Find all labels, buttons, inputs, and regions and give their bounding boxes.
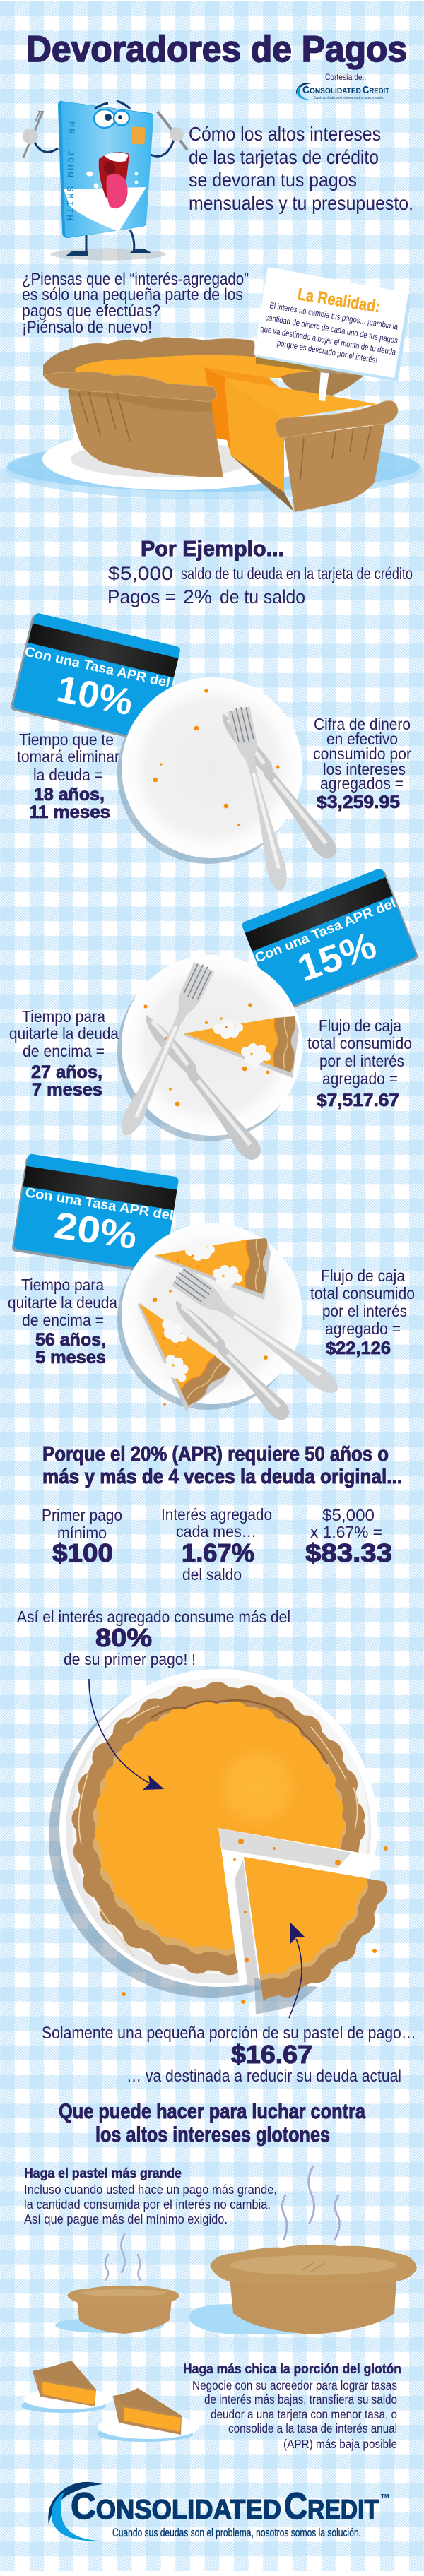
tip 2: haga mas chica la porcion: deudor a una tarjeta con menor tasa, o [211,2407,397,2421]
stat: interes agregado: cada mes… [176,1522,257,1541]
heading: porque el 20% [42,1443,402,1488]
illustration: big pie with slice [6,337,421,512]
icon: steam over small pie [105,2234,141,2280]
intro text: de las tarjetas de crédito [189,146,379,168]
plate 3: two slices with crumbs [108,1223,344,1425]
text: 80 percent [17,1608,290,1668]
courtesy logo: CONSOLIDATED [302,84,361,96]
text: cost 20%: $22,126 [326,1339,391,1358]
card: 15% APR: 15% [293,925,382,990]
text: cost 10%: $3,259.95 [317,793,400,812]
card: 10% APR: 10% [54,668,136,723]
text: cost 20% [310,1266,415,1358]
illustration: two slices on plates [21,2361,199,2442]
stat: interes agregado: 1.67% [182,1538,254,1567]
tip 1: haga el pastel mas grande [24,2166,277,2226]
card: 15% APR [241,867,419,1014]
text: time 10% [17,730,119,822]
question text: ¿Piensas que el “interés-agregado” [22,270,249,289]
text: cost 15%: por el interés [319,1052,404,1070]
tip 1: haga el pastel mas grande: la cantidad consumida por el interés no cambia. [24,2197,271,2212]
heading: que puede hacer [59,2100,365,2147]
callout: la realidad sign [254,267,412,401]
callout: la realidad sign: porque es devorado por el interés! [276,338,378,365]
text: cost 10%: Cifra de dinero [314,715,411,733]
example text: $5,000 [108,563,173,584]
example text [107,563,413,607]
text: time 15%: 27 años, [31,1062,102,1082]
text: 80 percent: 80% [95,1623,152,1652]
text: 80 percent: Así el interés agregado consume más del [17,1608,290,1626]
text: time 10%: tomará eliminar [17,747,119,766]
arrow: to big portion [89,1679,164,1790]
text: time 20%: quitarte la deuda [8,1293,118,1312]
courtesy logo: Cortesía de... [325,72,368,82]
text: cost 15%: agregado = [322,1069,398,1088]
stat: interes agregado [161,1505,272,1584]
stat: primer pago: Primer pago [42,1506,122,1524]
intro text: se devoran tus pagos [189,169,357,191]
stat: interes agregado: Interés agregado [161,1505,272,1524]
tip 2: haga mas chica la porcion: de interés más bajas, transfiera su saldo [204,2392,397,2406]
card: 20% APR [11,1153,179,1275]
courtesy logo [296,72,389,100]
callout: la realidad sign: La Realidad: [296,285,382,316]
text: cost 15% [307,1016,412,1110]
illustration: big pie side view [189,2245,417,2334]
stat: primer pago: $100 [52,1538,113,1567]
text: cost 15%: $7,517.67 [317,1091,399,1110]
plate 2: slice with crumbs [114,955,302,1165]
icon: steam over big pie [282,2166,339,2239]
text: cost 20%: por el interés [322,1302,407,1320]
question text [22,270,249,337]
tip 1: haga el pastel mas grande: Incluso cuando usted hace un pago más grande, [24,2182,277,2197]
text: cost 15%: total consumido [307,1034,412,1052]
stat: primer pago: mínimo [57,1524,107,1542]
text: cost 15%: Flujo de caja [319,1016,402,1035]
stat: interes agregado: del saldo [182,1565,242,1584]
card: 20% APR: Con una Tasa APR del [24,1185,175,1223]
tip 2: haga mas chica la porcion: Haga más chica la porción del glotón [183,2362,401,2377]
arrow: to small portion [289,1923,305,2018]
example text: de tu saldo [220,586,305,607]
text: cost 20%: Flujo de caja [321,1266,406,1285]
text: time 20%: 56 años, [35,1330,106,1350]
footer logo: TM [381,2493,389,2500]
text: time 20% [8,1276,118,1367]
tip 1: haga el pastel mas grande: Así que pague más del mínimo exigido. [24,2212,228,2226]
stat: calculo [305,1506,392,1567]
text: time 15%: Tiempo para [22,1007,106,1026]
stat: calculo: x 1.67% = [310,1523,382,1541]
intro text: Cómo los altos intereses [189,123,381,145]
text: time 10%: Tiempo que te [19,730,114,749]
intro text [189,123,413,214]
illustration: small pie side view [55,2286,179,2334]
heading: por ejemplo: Por Ejemplo... [141,536,284,561]
text: 80 percent: de su primer pago! ! [64,1650,196,1668]
icon: hungry credit card character: MR. JOHN SMITH [64,121,76,220]
text: time 15%: quitarte la deuda [9,1024,119,1043]
footer logo: CREDIT [284,2486,379,2527]
text: cost 10%: en efectivo [326,730,398,748]
text: solamente una porcion [42,2024,416,2086]
plate 1: empty with crumbs [117,677,341,894]
question text: pagos que efectúas? [22,302,160,321]
heading: porque el 20%: Porque el 20% (APR) requiere 50 años o [42,1443,389,1466]
text: cost 20%: agregado = [325,1319,401,1338]
text: time 20%: 5 meses [35,1348,106,1367]
text: time 15%: de encima = [23,1042,105,1060]
text: time 10%: 11 meses [29,802,110,822]
stat: primer pago [42,1506,122,1567]
courtesy logo: CREDIT [363,84,389,96]
stat: calculo: $5,000 [322,1506,375,1524]
text: cost 10% [313,715,411,812]
text: cost 10%: consumido por [313,744,411,763]
text: time 10%: la deuda = [33,766,103,784]
card: 10% APR [10,612,181,744]
footer logo: CONSOLIDATED [71,2486,281,2527]
question text: es sólo una pequeña parte de los [22,285,243,304]
text: solamente una porcion: $16.67 [231,2040,312,2069]
tip 2: haga mas chica la porcion [183,2362,401,2451]
illustration: top view pie with cut slice [49,1669,388,2014]
tip 2: haga mas chica la porcion: consolide a la tasa de interés anual [228,2421,397,2435]
card: 20% APR: 20% [52,1204,139,1257]
heading: que puede hacer: los altos intereses glotones [95,2123,330,2147]
icon: hungry credit card character [23,101,187,260]
text: time 20%: Tiempo para [21,1276,105,1294]
tip 2: haga mas chica la porcion: (APR) más baja posible [283,2437,397,2451]
text: time 10%: 18 años, [34,785,105,805]
heading: que puede hacer: Que puede hacer para luchar contra [59,2100,365,2123]
text: cost 10%: agregados = [320,774,404,793]
title: Devoradores de Pagos [26,29,407,70]
text: time 20%: de encima = [22,1311,104,1329]
example text: 2% [183,586,212,607]
tip 1: haga el pastel mas grande: Haga el pastel más grande [24,2166,182,2181]
text: cost 20%: total consumido [310,1284,415,1302]
question text: ¡Piénsalo de nuevo! [22,318,152,337]
text: time 15% [9,1007,119,1100]
text: cost 10%: los intereses [323,760,406,778]
example text: Pagos = [107,586,176,607]
card: 15% APR: Con una Tasa APR del [253,896,398,966]
footer logo [48,2482,389,2541]
tip 2: haga mas chica la porcion: Negocie con su acreedor para lograr tasas [192,2378,397,2392]
text: time 15%: 7 meses [32,1080,102,1100]
stat: calculo: $83.33 [305,1538,392,1567]
card: 10% APR: Con una Tasa APR del [23,644,172,691]
courtesy logo: Cuando sus deudas son el problema, nosotros somos la solución. [314,96,384,100]
